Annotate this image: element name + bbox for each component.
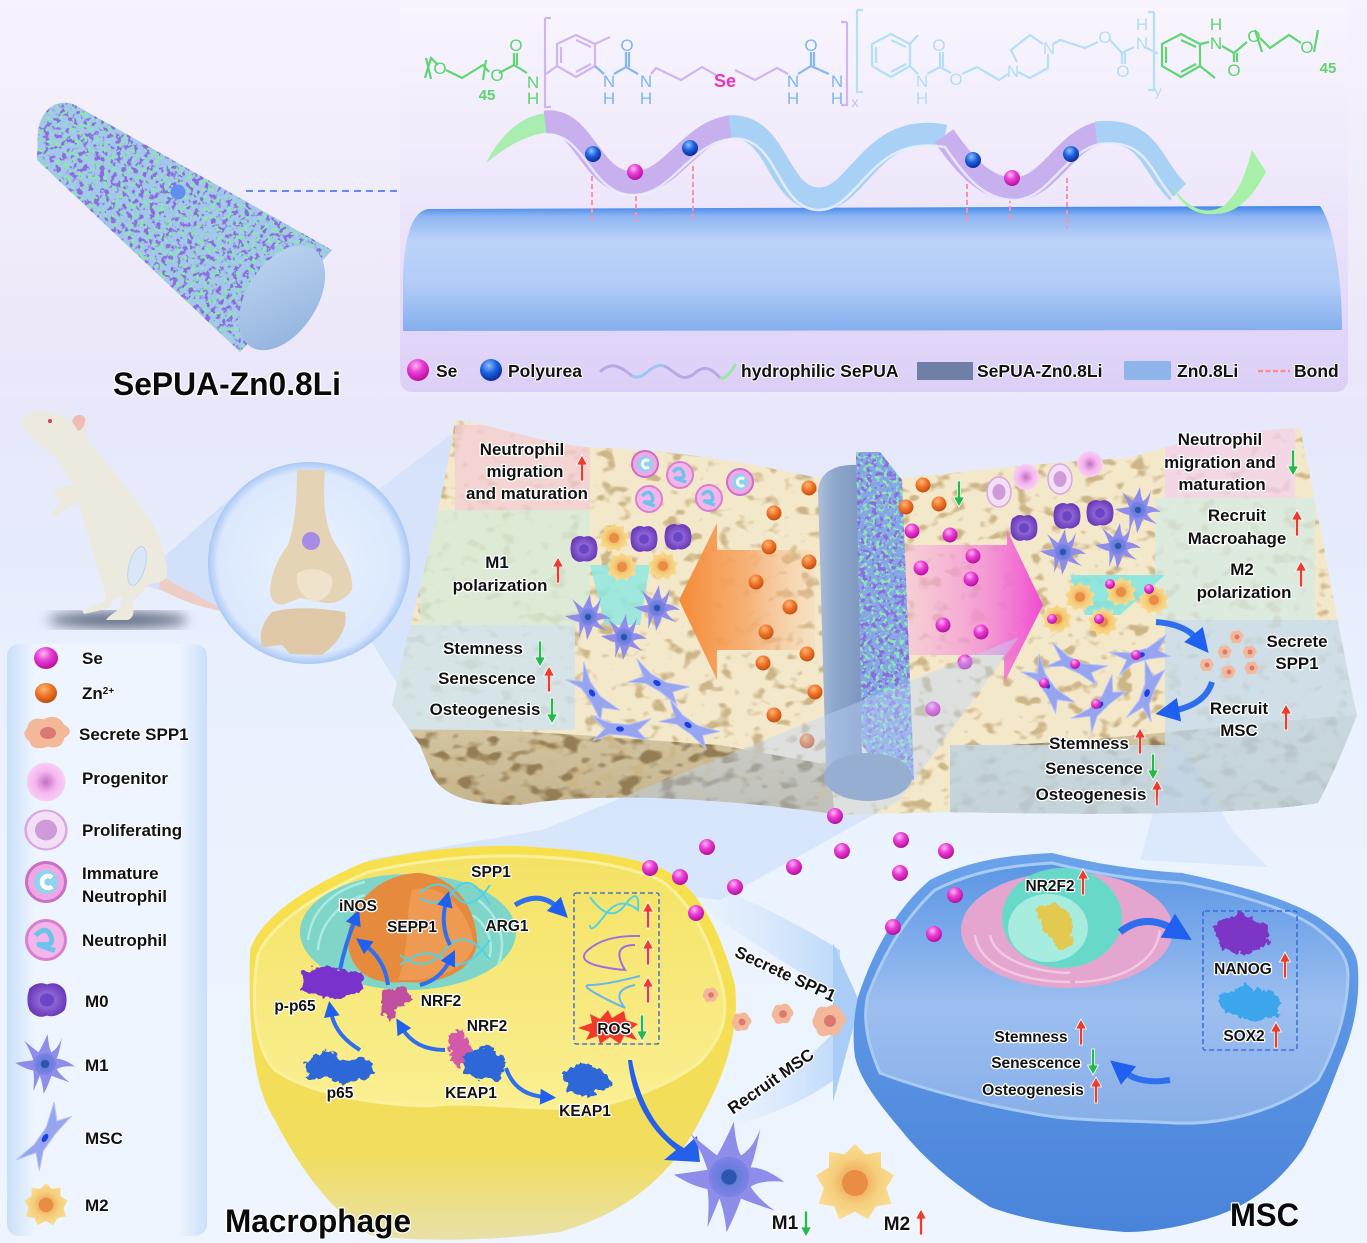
chemical structure of SePUA: y bbox=[1154, 83, 1162, 99]
SePUA coated tube bbox=[37, 102, 332, 352]
macrophage labels: NRF2 bbox=[467, 1018, 507, 1035]
chromatin bbox=[1036, 902, 1072, 950]
chemical structure of SePUA: N bbox=[1136, 34, 1148, 53]
panel: paracrine signals bbox=[700, 885, 860, 1125]
macrophage labels: ARG1 bbox=[485, 918, 529, 935]
arrow: nucleus to markers bbox=[1120, 921, 1175, 932]
label: Recruit MSC: Recruit MSC bbox=[724, 1045, 817, 1118]
arrow: zinc release bbox=[679, 523, 815, 680]
polymer ribbon bbox=[486, 113, 1266, 214]
chemical structure of SePUA: H bbox=[1136, 15, 1148, 34]
block labels: Senescence bbox=[1045, 759, 1143, 778]
pathway arrows bbox=[331, 898, 558, 1097]
legend row bbox=[407, 359, 1339, 381]
chemical structure of SePUA: H bbox=[527, 89, 539, 108]
cone to MSC bbox=[1140, 733, 1268, 867]
nucleus interior bbox=[1008, 894, 1088, 962]
neutrophils left bbox=[632, 451, 753, 512]
implant dot bbox=[302, 532, 320, 550]
femur bbox=[270, 470, 352, 604]
chemical structure of SePUA: O bbox=[804, 36, 818, 55]
cone to macrophage bbox=[366, 637, 1019, 900]
panel: cell legend: Se bbox=[82, 649, 103, 668]
panel: cell legend: Immature bbox=[82, 864, 159, 883]
bond dashes bbox=[592, 166, 1067, 228]
polyurea and Se beads bbox=[585, 140, 1079, 186]
chemical structure of SePUA: O bbox=[1227, 61, 1241, 80]
chemical structure of SePUA: H bbox=[640, 89, 652, 108]
MSC labels: NR2F2 bbox=[1025, 878, 1075, 895]
legend row: SePUA-Zn0.8Li bbox=[977, 361, 1102, 381]
zinc ions bbox=[748, 478, 946, 748]
panel: cell legend: Proliferating bbox=[82, 821, 182, 840]
mRNA strands bbox=[400, 883, 490, 965]
chemical structure of SePUA: O bbox=[1247, 27, 1261, 46]
legend row: Se bbox=[436, 361, 458, 381]
block labels: M1 bbox=[485, 553, 509, 572]
nucleus shell bbox=[1002, 868, 1122, 968]
block labels: MSC bbox=[1220, 721, 1258, 740]
MSC trend arrows bbox=[1076, 869, 1290, 1103]
chemical structure of SePUA: O bbox=[509, 36, 523, 55]
block labels: and maturation bbox=[466, 484, 588, 503]
Golgi folds bbox=[975, 930, 1160, 982]
MSCs right bbox=[1018, 635, 1174, 736]
legend row: Bond bbox=[1294, 361, 1339, 381]
dashed marker box bbox=[1203, 911, 1297, 1050]
ER folds bbox=[308, 882, 502, 965]
block labels: SPP1 bbox=[1275, 654, 1319, 673]
block labels: polarization bbox=[453, 576, 547, 595]
selenium ions bbox=[904, 524, 1154, 716]
chemical structure of SePUA: O bbox=[949, 70, 963, 89]
label: M2 up bbox=[884, 1209, 926, 1235]
macrophage labels: p-p65 bbox=[274, 998, 316, 1015]
chemical structure of SePUA: O bbox=[433, 59, 447, 78]
ER bbox=[300, 874, 516, 990]
nucleus bbox=[348, 873, 477, 983]
macrophages left bbox=[565, 523, 692, 660]
chemical structure of SePUA: H bbox=[787, 89, 799, 108]
MSC labels: Senescence bbox=[991, 1055, 1081, 1072]
protein: NRF2 bbox=[382, 986, 414, 1022]
chemical structure of SePUA: N bbox=[787, 72, 799, 91]
label: M1 down: M1 bbox=[772, 1213, 799, 1234]
label: Secrete SPP1: Secrete SPP1 bbox=[732, 942, 839, 1006]
chemical structure of SePUA: O bbox=[1116, 62, 1130, 81]
dashed connector bbox=[246, 190, 400, 192]
panel: cell legend: MSC bbox=[85, 1129, 123, 1148]
chemical structure of SePUA: N bbox=[831, 72, 843, 91]
legend row: Polyurea bbox=[508, 361, 582, 381]
chemical structure of SePUA: H bbox=[916, 89, 928, 108]
Golgi bbox=[961, 872, 1173, 988]
block labels: polarization bbox=[1197, 583, 1291, 602]
MSC labels: NANOG bbox=[1214, 961, 1272, 978]
panel: bone block bbox=[385, 415, 1365, 820]
chemical structure of SePUA: N bbox=[603, 72, 615, 91]
panel: cell legend: Neutrophil bbox=[82, 931, 167, 950]
complex NRF2 KEAP1 bbox=[448, 1028, 506, 1080]
chemical structure of SePUA: H bbox=[603, 89, 615, 108]
arrow: stemness bbox=[1123, 1071, 1170, 1081]
patella lobe bbox=[297, 569, 333, 602]
Zn0.8Li cylinder bbox=[403, 206, 1342, 331]
MSCs left bbox=[563, 657, 720, 754]
chemical structure of SePUA: H bbox=[831, 89, 843, 108]
chemical structure of SePUA: N bbox=[916, 72, 928, 91]
block labels: M2 bbox=[1230, 560, 1254, 579]
block labels: Macroahage bbox=[1188, 529, 1286, 548]
label: M2 up: M2 bbox=[884, 1214, 910, 1235]
arrow: secrete bbox=[1156, 622, 1198, 640]
protein: p65 bbox=[305, 1050, 374, 1085]
heading: SePUA-Zn0.8Li: SePUA-Zn0.8Li bbox=[113, 366, 341, 402]
ROS burst bbox=[578, 1010, 638, 1044]
panel: cell legend: Progenitor bbox=[82, 769, 168, 788]
chemical structure of SePUA: N bbox=[1210, 34, 1222, 53]
block labels: Osteogenesis bbox=[430, 700, 540, 719]
macrophage labels: iNOS bbox=[339, 898, 377, 915]
block labels: migration and bbox=[1164, 453, 1276, 472]
panel: cell legend: 2+ bbox=[103, 686, 114, 697]
macrophage labels: KEAP1 bbox=[445, 1085, 497, 1102]
MSC labels: Stemness bbox=[994, 1029, 1068, 1046]
panel: cell legend bbox=[7, 644, 207, 1236]
block labels: Neutrophil bbox=[1178, 430, 1262, 449]
tibia bbox=[261, 608, 346, 655]
block trend arrows bbox=[534, 450, 1306, 806]
macrophage labels: KEAP1 bbox=[559, 1103, 611, 1120]
block labels: maturation bbox=[1178, 475, 1266, 494]
block labels bbox=[430, 430, 1328, 804]
macrophage labels: ROS bbox=[597, 1021, 631, 1038]
big pale arrow bbox=[833, 943, 860, 1102]
chemical structure of SePUA: N bbox=[527, 73, 539, 92]
arrow: recruit bbox=[1172, 682, 1212, 711]
SPP1 secretion bbox=[1200, 630, 1259, 678]
panel: MSC cell bbox=[854, 853, 1358, 1232]
arrows in nucleus bbox=[340, 902, 450, 985]
panel: cell legend: M1 bbox=[85, 1056, 109, 1075]
SPP1 particles bbox=[703, 987, 846, 1036]
block labels: Recruit bbox=[1210, 699, 1268, 718]
protein: p-p65 bbox=[302, 965, 364, 998]
band: secrete SPP1 bbox=[700, 885, 840, 1000]
macrophage labels: NRF2 bbox=[421, 993, 461, 1010]
block labels: Stemness bbox=[1049, 734, 1129, 753]
macrophage outer wall bbox=[250, 846, 736, 1240]
chemical structure of SePUA: O bbox=[932, 36, 946, 55]
block labels: Stemness bbox=[443, 639, 523, 658]
cone from rat to knee bbox=[135, 497, 232, 612]
chemical structure of SePUA: N bbox=[1007, 62, 1019, 81]
MSC labels: Osteogenesis bbox=[982, 1082, 1084, 1099]
block labels: Neutrophil bbox=[480, 440, 564, 459]
MSC inner wall bbox=[866, 863, 1348, 1123]
block labels: Recruit bbox=[1208, 506, 1266, 525]
dashed mRNA box bbox=[574, 893, 659, 1044]
chemical structure of SePUA: 45 bbox=[1320, 60, 1336, 77]
falling selenium ions bbox=[642, 808, 963, 942]
panel: cell legend: Secrete SPP1 bbox=[79, 725, 189, 744]
chemical structure of SePUA: O bbox=[620, 36, 634, 55]
nucleoplasm cut bbox=[398, 888, 474, 980]
chemical structure of SePUA: N bbox=[640, 72, 652, 91]
MSC labels: SOX2 bbox=[1223, 1028, 1265, 1045]
cone from knee to bone block bbox=[311, 420, 470, 720]
macrophage labels: SEPP1 bbox=[387, 919, 437, 936]
panel: surface chemistry bbox=[400, 0, 1348, 392]
panel: cell legend: Zn bbox=[82, 684, 103, 703]
large M2 cell bbox=[816, 1144, 894, 1219]
label: M1 down bbox=[772, 1211, 812, 1237]
MSC labels bbox=[982, 878, 1272, 1099]
chemical structure of SePUA: 45 bbox=[479, 87, 495, 104]
chemical structure of SePUA: O bbox=[1300, 38, 1314, 57]
front face of the block bbox=[385, 715, 1365, 820]
implant rod bbox=[818, 448, 915, 801]
panel: macrophage cell bbox=[250, 846, 736, 1240]
protein: KEAP1 free bbox=[562, 1062, 612, 1097]
chemical structure of SePUA: H bbox=[1210, 15, 1222, 34]
legend row: hydrophilic SePUA bbox=[741, 361, 899, 381]
large M1 cell bbox=[674, 1122, 784, 1232]
block labels: Secrete bbox=[1266, 632, 1328, 651]
macrophage labels: p65 bbox=[327, 1085, 354, 1102]
chemical structure of SePUA: Se bbox=[714, 71, 736, 91]
panel: cell legend: Neutrophil bbox=[82, 887, 167, 906]
block labels: migration bbox=[487, 462, 563, 481]
block labels: Senescence bbox=[438, 669, 536, 688]
chemical structure of SePUA bbox=[425, 10, 1336, 110]
arrow: macrophage output bbox=[628, 1060, 700, 1162]
arrow: selenium release bbox=[905, 530, 1043, 683]
heading: Macrophage: Macrophage bbox=[225, 1203, 411, 1239]
chemical structure of SePUA: x bbox=[852, 94, 858, 110]
macrophage labels: SPP1 bbox=[471, 864, 511, 881]
chemical structure of SePUA: O bbox=[1098, 28, 1112, 47]
panel: cell legend: M0 bbox=[85, 992, 109, 1011]
legend row: Zn0.8Li bbox=[1177, 361, 1238, 381]
knee magnifier circle bbox=[208, 462, 410, 664]
rat illustration bbox=[21, 410, 228, 628]
heading: MSC: MSC bbox=[1230, 1197, 1299, 1233]
chemical structure of SePUA: O bbox=[490, 66, 504, 85]
neutrophil precursors right bbox=[987, 451, 1103, 507]
panel: cell legend: M2 bbox=[85, 1196, 109, 1215]
macrophages right bbox=[1010, 487, 1169, 636]
MSC outer wall bbox=[854, 853, 1358, 1232]
macrophage inner wall bbox=[254, 856, 725, 1108]
band: recruit MSC bbox=[725, 1025, 840, 1125]
block labels: Osteogenesis bbox=[1036, 785, 1146, 804]
macrophage labels bbox=[274, 864, 631, 1120]
chemical structure of SePUA: N bbox=[1043, 39, 1055, 58]
